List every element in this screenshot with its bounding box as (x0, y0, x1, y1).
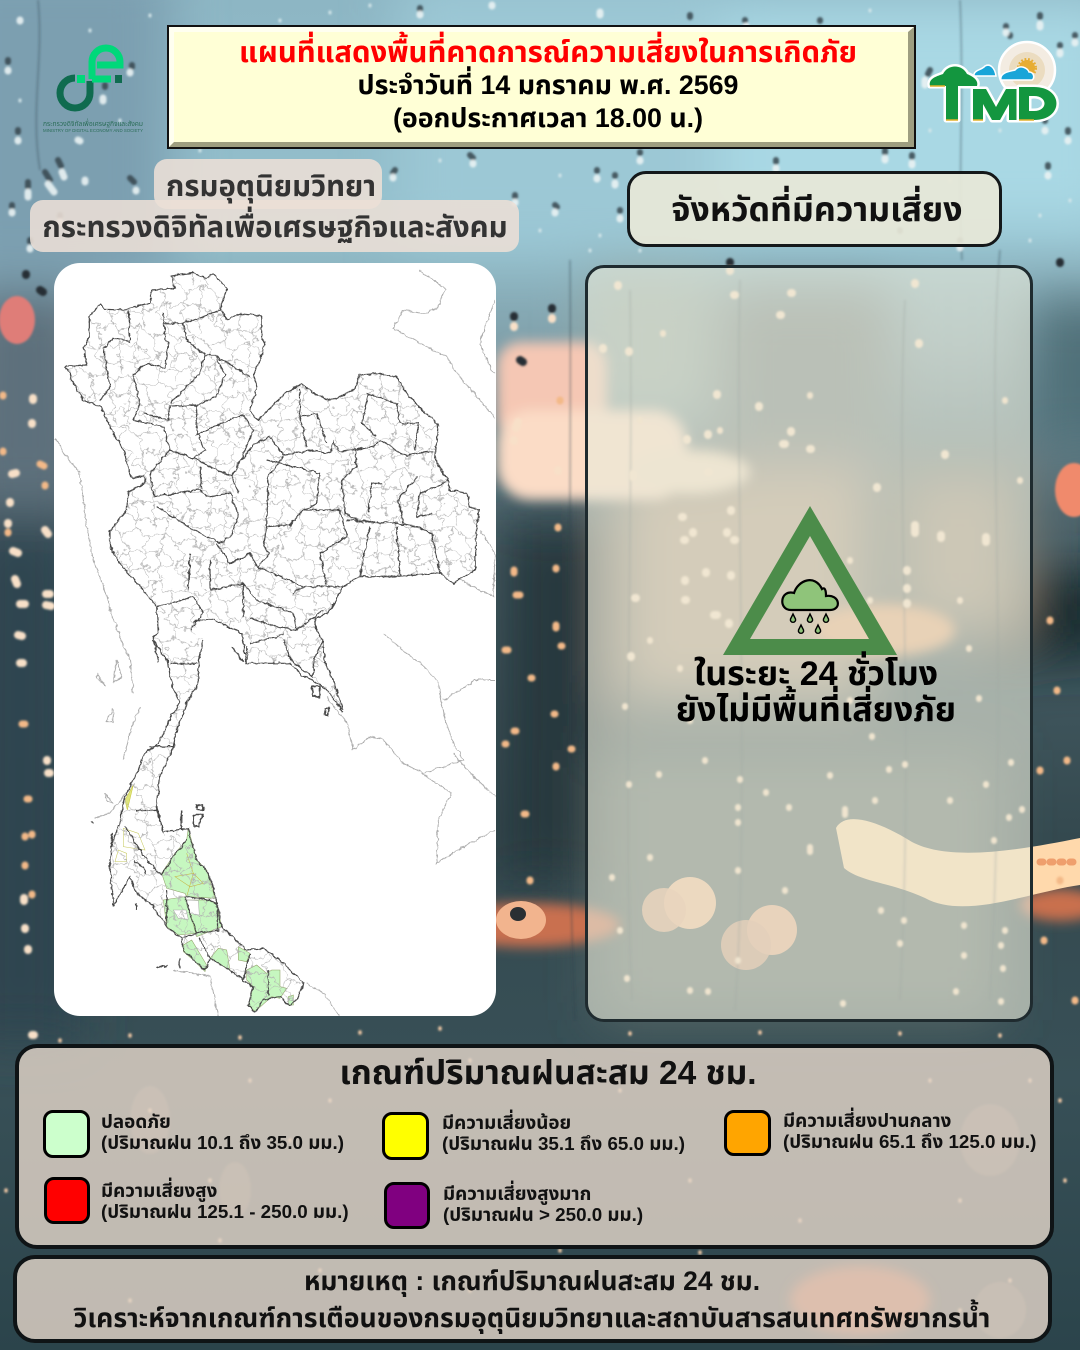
streaks (36, 0, 1000, 1020)
panel: rainfall legend (15, 1044, 1054, 1249)
title box (167, 25, 916, 149)
legend text: medium: มีความเสี่ยงปานกลาง (783, 1110, 951, 1131)
legend text: low (442, 1110, 685, 1154)
swatch: medium (724, 1110, 771, 1156)
legend text: very high (443, 1180, 643, 1225)
legend title: เกณฑ์ปริมาณฝนสะสม 24 ชม. (339, 1055, 757, 1092)
panel: risk provinces (585, 265, 1033, 1022)
department text: กรมอุตุนิยมวิทยา (166, 170, 376, 203)
legend text: high: (ปริมาณฝน 125.1 - 250.0 มม.) (101, 1201, 349, 1222)
label: ministry (30, 200, 519, 252)
swatch: low (382, 1112, 429, 1160)
lower drops (3, 262, 1075, 1321)
map of Thailand (54, 270, 496, 1016)
title line 2: ประจำวันที่ 14 มกราคม พ.ศ. 2569 (358, 70, 738, 100)
logo: Ministry of Digital Economy and Society: MINISTRY OF DIGITAL ECONOMY AND SOCIETY (43, 128, 143, 133)
heading: provinces at risk (627, 171, 1002, 247)
district texture (68, 273, 478, 1008)
legend text: very high: (ปริมาณฝน > 250.0 มม.) (443, 1204, 643, 1225)
swatch: very high (384, 1182, 430, 1229)
label: department (154, 159, 382, 209)
message: ในระยะ 24 ชั่วโมง (694, 655, 938, 693)
bokeh streak (836, 819, 1080, 906)
swatch: safe (43, 1110, 90, 1158)
logo: Ministry of Digital Economy and Society: กระทรวงดิจิทัลเพื่อเศรษฐกิจและสังคม (43, 118, 143, 128)
swatch: high (44, 1177, 90, 1224)
legend text: low: (ปริมาณฝน 35.1 ถึง 65.0 มม.) (442, 1133, 685, 1154)
icon: green warning triangle with rain cloud (723, 506, 897, 655)
province borders (66, 273, 479, 710)
legend text: medium: (ปริมาณฝน 65.1 ถึง 125.0 มม.) (783, 1131, 1036, 1152)
legend text: high: มีความเสี่ยงสูง (101, 1180, 217, 1201)
neighbouring country borders (55, 270, 495, 1017)
title line 3: (ออกประกาศเวลา 18.00 น.) (393, 103, 703, 133)
panel: map (54, 263, 496, 1016)
panel: note (13, 1255, 1052, 1343)
legend text: very high: มีความเสี่ยงสูงมาก (443, 1183, 591, 1204)
legend text: low: มีความเสี่ยงน้อย (442, 1112, 571, 1133)
legend text: safe (101, 1111, 344, 1153)
legend text: safe: (ปริมาณฝน 10.1 ถึง 35.0 มม.) (101, 1132, 344, 1153)
legend text: high (101, 1178, 349, 1222)
title line 1: แผนที่แสดงพื้นที่คาดการณ์ความเสี่ยงในการเกิดภัย (239, 36, 857, 69)
legend text: safe: ปลอดภัย (101, 1111, 171, 1132)
logo: Ministry of Digital Economy and Society (43, 44, 143, 133)
message: ยังไม่มีพื้นที่เสี่ยงภัย (676, 691, 956, 729)
heading: provinces at risk: จังหวัดที่มีความเสี่ยง (671, 191, 963, 229)
note line 1: หมายเหตุ : เกณฑ์ปริมาณฝนสะสม 24 ชม. (304, 1266, 760, 1296)
message (676, 651, 956, 729)
safe rainfall areas (115, 785, 293, 1012)
ministry text: กระทรวงดิจิทัลเพื่อเศรษฐกิจและสังคม (42, 211, 508, 244)
logo: TMD (927, 40, 1059, 122)
legend text: medium (783, 1108, 1036, 1152)
top drops (8, 5, 1075, 251)
note line 2: วิเคราะห์จากเกณฑ์การเตือนของกรมอุตุนิยมวิทยาและสถาบันสารสนเทศทรัพยากรน้ำ (74, 1303, 990, 1333)
